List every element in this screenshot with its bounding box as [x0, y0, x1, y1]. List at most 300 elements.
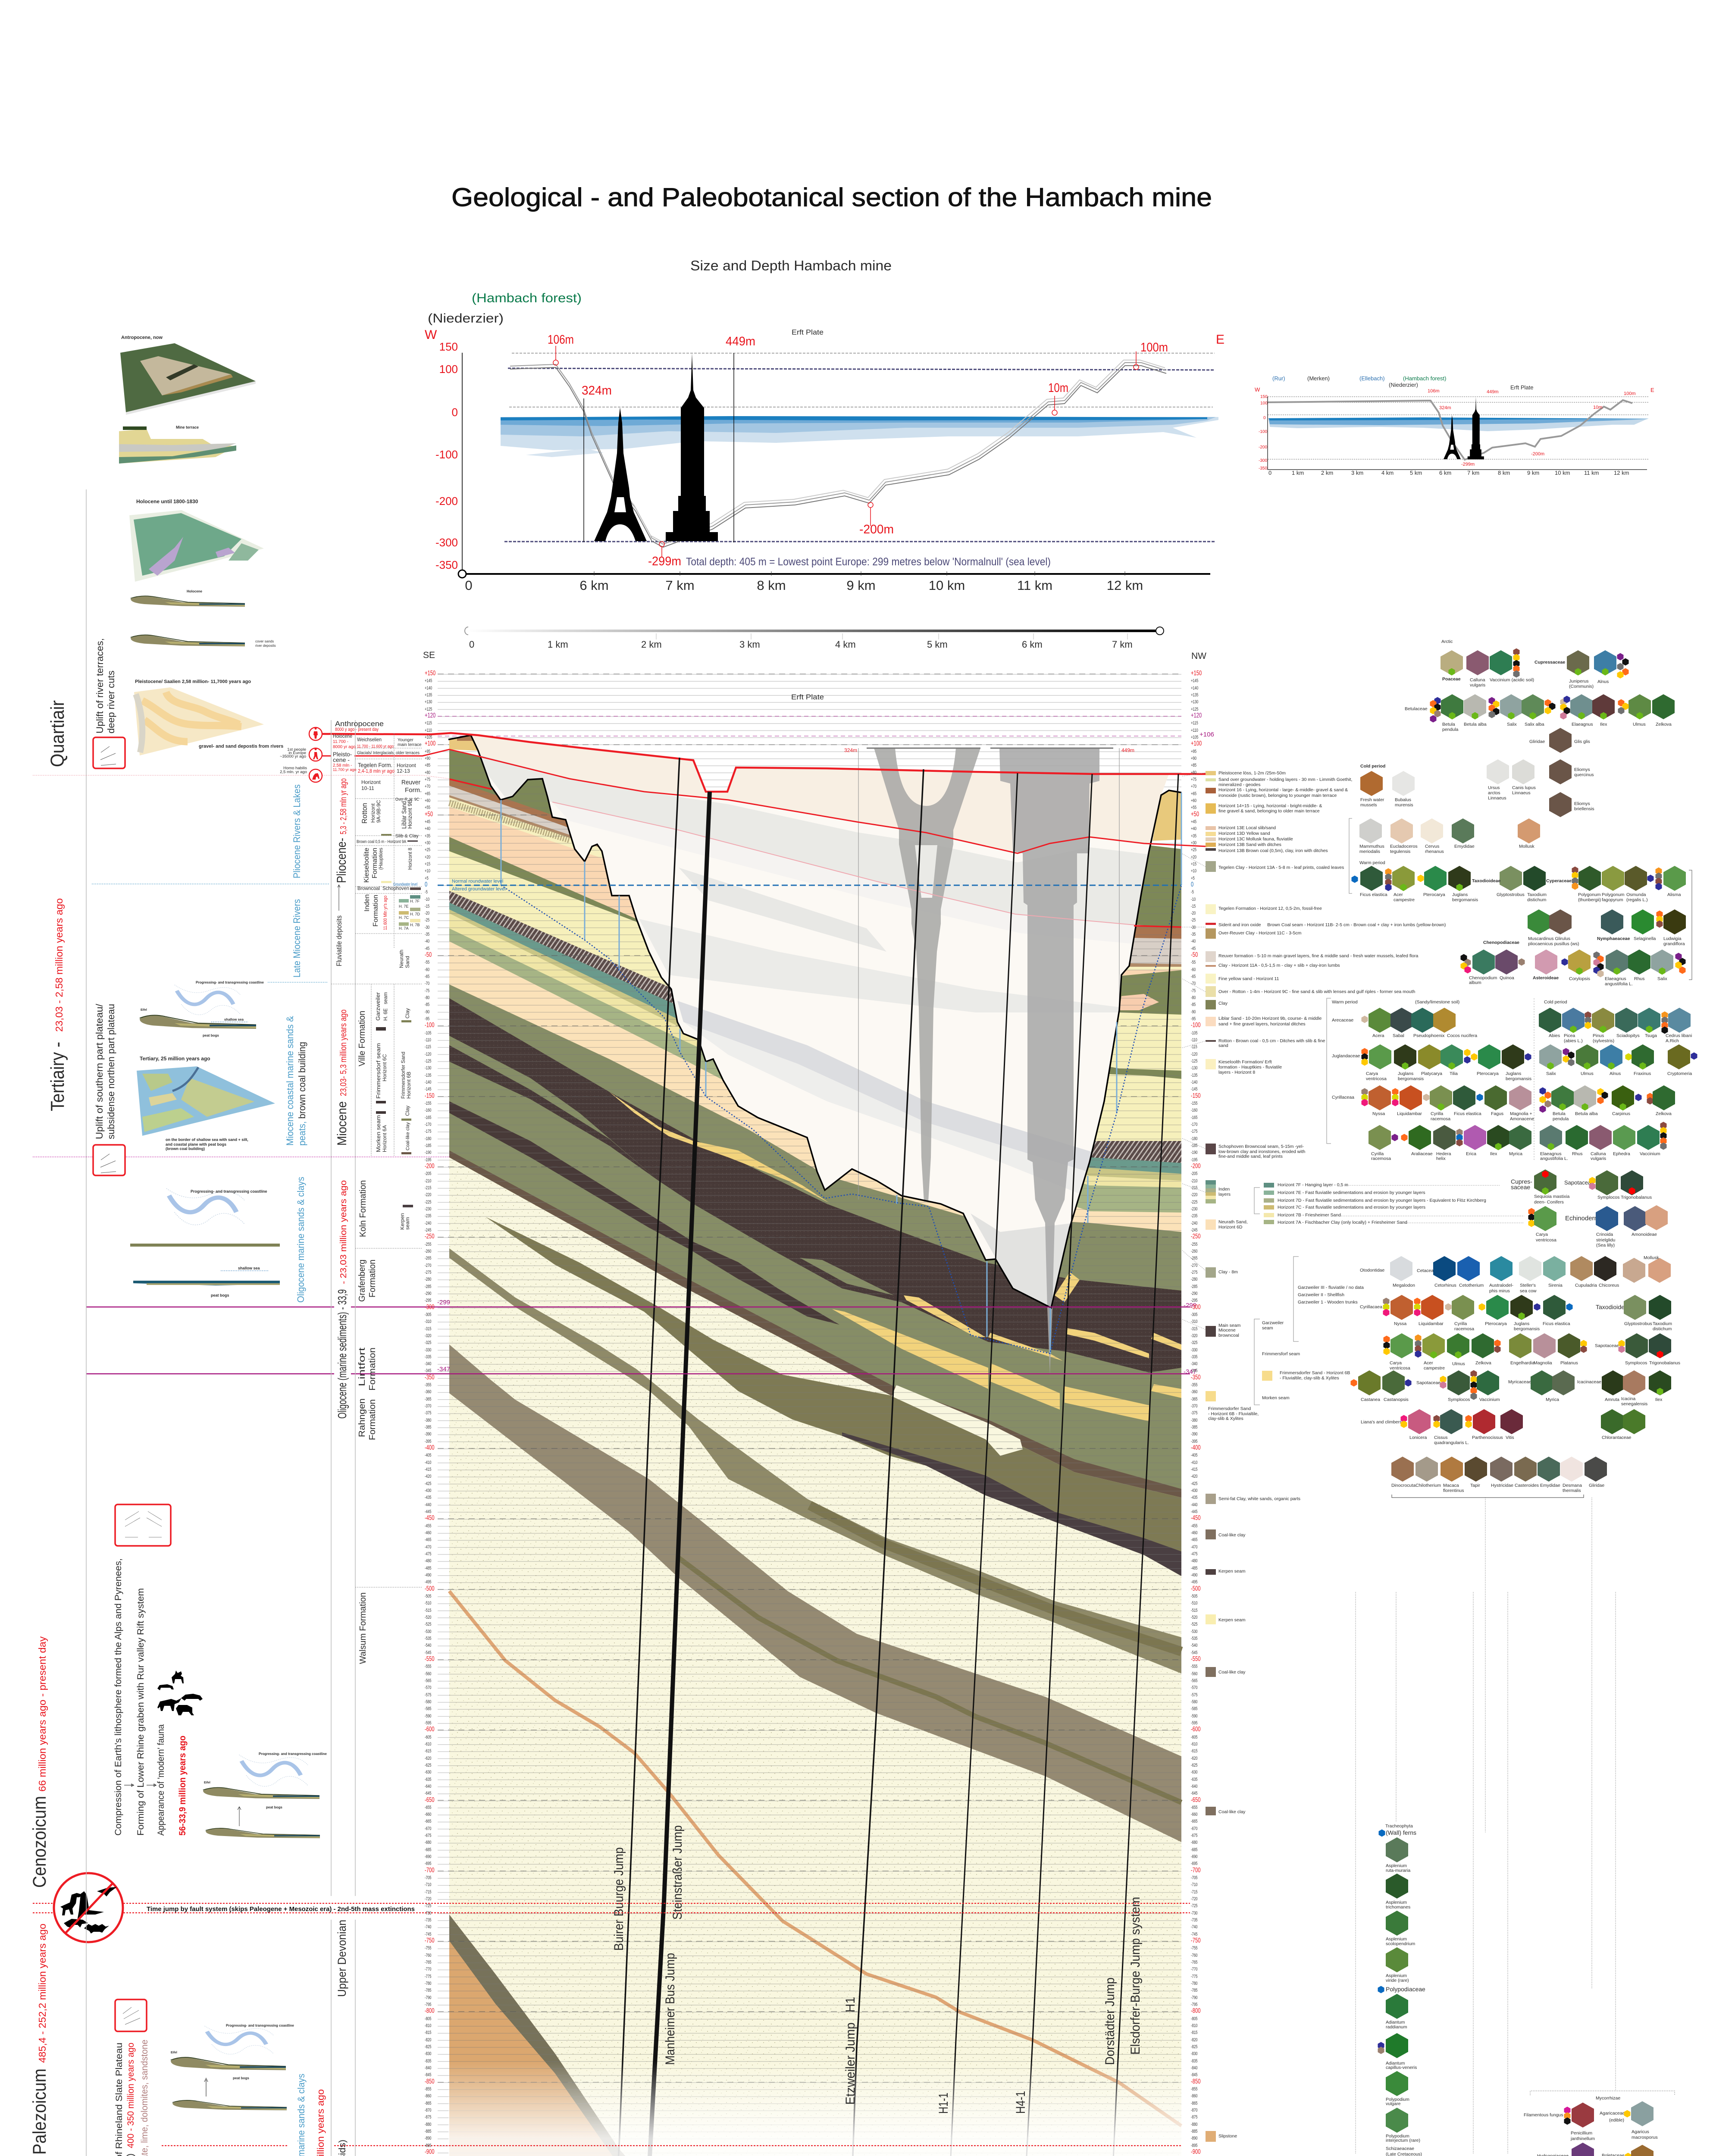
- overview km axis: 5 km: [1410, 470, 1422, 476]
- leader lines to legend: [1182, 773, 1207, 1330]
- group: Chenopodium row: Rhus: [1634, 976, 1645, 981]
- legend: lower swatches: Coal-like clay: [1218, 1809, 1246, 1814]
- Pliocene table rows: Kieseloolite: [363, 848, 370, 883]
- horizontal km axis: 6 km: [579, 578, 609, 593]
- Oligocene formations table: Formation: [368, 1399, 377, 1440]
- layer: orange slip band: [449, 1591, 1181, 2126]
- layer: Inden tan: [449, 909, 1181, 1498]
- group: warm period flora: Glyptostrobus: [1497, 892, 1525, 897]
- human era captions: Homo habilis: [283, 766, 307, 771]
- group: warm period flora: Pterocarya: [1423, 892, 1445, 897]
- group: Castanea to Ilex row: Icacinaceae: [1577, 1379, 1601, 1385]
- horizontal km axis: 12 km: [1107, 578, 1143, 593]
- note: compression: [113, 1558, 188, 1836]
- Quaternary table rows: cene -: [333, 756, 350, 763]
- panel: flora and fauna Inden and Garzweiler: [1350, 1169, 1680, 2156]
- row: Juglandaceae: bergomansis: [1506, 1076, 1531, 1081]
- horizontal km axis: 8 km: [757, 578, 786, 593]
- layer: Tegelen clay olive: [449, 749, 1181, 1498]
- horizontal km axis: [458, 570, 1210, 593]
- Inden formation table: H. 7B: [410, 923, 420, 927]
- group: Carya to Trigonobalanus row: Trigonobalanus: [1649, 1360, 1680, 1366]
- group: mammoth row: tegulensis: [1390, 849, 1410, 854]
- human era captions: [280, 747, 307, 774]
- fault labels: Dorstädter Jump: [1103, 1977, 1117, 2065]
- ghost tower guides and captions: [844, 747, 1134, 1200]
- legend: lower swatches: [1206, 1494, 1300, 2156]
- left period separators: [33, 733, 450, 1587]
- group: Arctic flora: Juniperus: [1569, 679, 1589, 684]
- icon: uplift box Devonian: [115, 1999, 147, 2031]
- group: marine fauna: Mollusk: [1644, 1255, 1659, 1260]
- group: Castanea to Ilex row: Icacina: [1621, 1396, 1635, 1401]
- note: plateau uplift: subsidense northen part plateau: [106, 1004, 116, 1139]
- group: warm period flora: Warm period: [1359, 860, 1385, 865]
- panel: geological cross section: [322, 674, 1207, 2156]
- Oligocene formations table: Formation: [368, 1348, 377, 1391]
- human era captions: in Europe: [288, 751, 306, 755]
- layer: clay 8m olive: [449, 984, 1181, 1498]
- epoch: Miocene: [335, 1009, 349, 1146]
- epoch: Pliocene: [335, 778, 349, 966]
- Oligocene formations table: Formation: [368, 1260, 377, 1297]
- fungi right: [1598, 2101, 1658, 2156]
- vertical axis: 100: [439, 363, 458, 376]
- Quaternary table rows: Tegelen Form.: [358, 761, 392, 768]
- overview km axis: 4 km: [1381, 470, 1394, 476]
- diagram: Holocene sections: Holocene: [187, 589, 203, 593]
- group: Carya and echinoderms: Echinoderms: [1565, 1215, 1603, 1222]
- group: mammoth row: Emydidae: [1454, 844, 1475, 849]
- place labels: Erft Plate: [792, 328, 824, 336]
- Inden formation table: H. 7F: [410, 899, 420, 903]
- group: lianas and climbers: Vitis: [1506, 1435, 1514, 1440]
- legend: Pliocene captions: Reuver formation - 5-10 m main gravel layers, fine & middle sand - fresh water mussels, leafed flora: [1218, 953, 1419, 959]
- text: peats: peats, brown coal building: [297, 1042, 307, 1146]
- row: Araliaceae and heaths: Myrica: [1509, 1151, 1522, 1156]
- group: Miocene mammals: Emydidae: [1540, 1483, 1560, 1488]
- row: Arecaceae and conifers: [1332, 1008, 1692, 1044]
- legend: Pliocene captions: Horizont 16 - Lying, horizontal - large- &-middle- gravel & sand &: [1218, 787, 1348, 793]
- Oligocene formations table: seam: [404, 1217, 410, 1230]
- row: Araliaceae and heaths: Calluna: [1591, 1151, 1606, 1156]
- overview km axis: 9 km: [1527, 470, 1539, 476]
- group: warm period flora: distichum: [1527, 897, 1547, 903]
- layer: sand stipple: [449, 1157, 1181, 2156]
- place labels: E: [1216, 332, 1224, 347]
- Quaternary table rows: 12-13: [397, 768, 410, 774]
- diagram: Tertiary coastline: Progressing- and transgressing coastline: [196, 981, 264, 984]
- overview km axis: 8 km: [1498, 470, 1510, 476]
- time jump lines: [33, 1903, 1190, 2146]
- group: warm period flora: Taxodioideae: [1472, 878, 1500, 884]
- human era captions: ~35000 yr ago: [280, 754, 306, 759]
- panel: chronostratigraphy table: [280, 720, 422, 1664]
- overview labels: (Niederzier): [1389, 382, 1418, 388]
- Miocene formations table: Garzweiler: [375, 992, 381, 1021]
- icon: Eiffel tower silhouette: [594, 407, 647, 541]
- group: Carya and echinoderms: ventricosa: [1536, 1238, 1556, 1243]
- map: Holocene: [129, 498, 264, 582]
- layer: Inden pale: [449, 913, 1181, 1498]
- group: Betulaceae: Zelkova: [1656, 722, 1672, 727]
- group: lianas and climbers: Chlorantaceae: [1602, 1435, 1631, 1440]
- legend: lower swatches: Semi-fat Clay, white sands, organic parts: [1218, 1496, 1300, 1501]
- horizontal km axis: 11 km: [1017, 578, 1052, 593]
- epoch: Upper Devonian: Upper Devonian: [335, 1920, 348, 1997]
- group: Cyrillaceae and Taxodioideae: Pterocarya: [1485, 1321, 1507, 1326]
- group: cold period fauna: Fresh water: [1360, 797, 1384, 802]
- Pliocene table rows: Reuver: [401, 779, 420, 786]
- legend: Pliocene captions: formation - Hauptkies - fluviatile: [1218, 1065, 1282, 1070]
- grid lines: [438, 674, 1181, 2156]
- void: light band: [683, 1022, 1094, 1200]
- Pliocene table rows: Brown coal 0,5 m - Horizont 9A: [357, 839, 406, 844]
- epoch: Oligocene: - 23,03 million years ago: [339, 1180, 348, 1284]
- row: Cyrillaceae: [1332, 1085, 1675, 1122]
- layer: thin clay: [449, 795, 1181, 1498]
- void: cream ghost band: [471, 733, 1181, 853]
- Pliocene table rows: (Hauptkies: [378, 848, 384, 870]
- group: Carya to Trigonobalanus row: Carya: [1390, 1360, 1402, 1366]
- Quaternary table rows: Holocene: [333, 733, 352, 739]
- ghost Empire State scale: [999, 748, 1099, 1375]
- vertical axis: -300: [435, 536, 458, 549]
- note: river terraces: Uplift of river terraces,: [94, 638, 105, 733]
- Pliocene table rows: Rotton: [360, 803, 369, 824]
- group: Castanea to Ilex row: Castanea: [1361, 1397, 1380, 1402]
- note: plateau uplift: Uplift of southern part plateau/: [94, 1003, 105, 1139]
- group: Cyrillaceae and Taxodioideae: Cyrilla: [1454, 1321, 1467, 1326]
- era date: Palezoicum: 485,4 - 252,2 million years ago: [37, 1924, 48, 2063]
- group: marine fauna: Cupuladria: [1575, 1283, 1597, 1288]
- note: plateau uplift: [94, 1003, 116, 1139]
- legend: Pliocene captions: fine gravel & sand, belonging to older main terrace: [1218, 808, 1320, 814]
- row: Juglandaceae: Salix: [1546, 1071, 1556, 1076]
- purple depth captions: [437, 731, 1214, 1376]
- group: Miocene mammals: Macaca: [1443, 1483, 1459, 1488]
- group: wall ferns: viride (rare): [1386, 1978, 1409, 1983]
- map: Pleistocene: gravel- and sand depostis from rivers: [199, 744, 283, 749]
- legend: Pliocene captions: Over-Reuver Clay - Horizont 11C - 3-5cm: [1218, 931, 1302, 936]
- layer: cream wedge: [892, 1385, 1023, 1456]
- group: Gliridae: Glis glis: [1574, 739, 1590, 744]
- panel: small overview chart: [1255, 375, 1654, 476]
- group: warm period flora: Cyperaceae: [1546, 878, 1572, 884]
- overview labels: -100: [1259, 429, 1267, 434]
- scale labels: NW: [1191, 651, 1206, 661]
- fungi left: janthinellum: [1570, 2136, 1595, 2141]
- depth labels: -299m: [648, 555, 681, 568]
- group: aquatic plants: Selaginella: [1634, 936, 1656, 941]
- group: Chenopodium row: Asteroideae: [1533, 975, 1559, 981]
- Miocene formations table: Horizont 6C: [382, 1054, 388, 1081]
- legend: Miocene and Oligocene: [1206, 1219, 1364, 1421]
- human era captions: 2,5 mln. yr ago: [280, 770, 307, 774]
- note: compression: Appearance of 'modern' fauna: [156, 1724, 166, 1836]
- overview km axis: [1268, 397, 1647, 476]
- panel: epoch column: [307, 778, 395, 2156]
- diagram: Holocene sections: [131, 589, 276, 648]
- group: Polypodiaceae: Adiantum: [1386, 2061, 1405, 2066]
- layer: fine yellow sand: [449, 797, 1181, 1498]
- layer: lower seam: [449, 1101, 839, 1325]
- scale labels: 7 km: [1112, 639, 1133, 650]
- group: Castanea to Ilex row: Myrica: [1546, 1397, 1559, 1402]
- Quaternary table rows: 11.700 -: [333, 740, 348, 744]
- legend: Miocene and Oligocene: Morken seam: [1262, 1395, 1290, 1401]
- Miocene formations table: Horizont 6A: [382, 1125, 388, 1152]
- purple elevation lines: [438, 716, 1181, 736]
- row: Araliaceae and heaths: racemosa: [1371, 1156, 1391, 1161]
- place labels: W: [425, 328, 437, 342]
- row: Cyrillaceae: Liquidambar: [1397, 1111, 1422, 1116]
- human era captions: 1st people: [287, 747, 306, 752]
- group: warm period flora: fagopyrum: [1602, 897, 1623, 903]
- panel: paleogeography maps: [119, 335, 327, 2156]
- group: Carya to Trigonobalanus row: Engelhardia: [1510, 1360, 1534, 1366]
- group: lianas and climbers: Parthenocissus: [1472, 1435, 1503, 1440]
- overview km axis: 11 km: [1584, 470, 1599, 476]
- era: Cenozoicum: Cenozoicum: [29, 1796, 50, 1888]
- group: warm period flora: (regalis L.): [1626, 897, 1648, 903]
- group: mammoth row: meriodalis: [1359, 849, 1380, 854]
- horizontal km axis: 9 km: [846, 578, 876, 593]
- note: Hercynic orogenese: 400 - 350 million years ago: [126, 2043, 136, 2148]
- Inden formation table: Sand: [404, 956, 410, 968]
- group: marine fauna: Megalodon: [1393, 1283, 1415, 1288]
- row: Arecaceae and conifers: Abies: [1549, 1033, 1560, 1038]
- group: wall ferns: Asplenium: [1386, 1973, 1407, 1978]
- group: wall ferns: (Wall) ferns: [1386, 1829, 1416, 1836]
- overview labels: W: [1255, 386, 1260, 393]
- legend: Pliocene captions: Siderit and iron oxide Brown Coal seam - Horizont 11B- 2-5 cm - Brown coal + clay + iron lumbs (yellow-brown): [1218, 922, 1446, 928]
- Pliocene table rows: Liblar Sand: [401, 801, 408, 829]
- depth labels: -200m: [859, 523, 894, 536]
- depth labels: Total depth: 405 m = Lowest point Europe: 299 metres below 'Normalnull' (sea level): [686, 556, 1051, 568]
- Quaternary table rows: Horizont: [397, 762, 416, 768]
- note: Hercynic orogenese: [114, 2040, 150, 2156]
- legend: Pliocene captions: Horizont 13B Sand with ditches: [1218, 842, 1281, 847]
- legend: Miocene and Oligocene: browncoal: [1218, 1333, 1239, 1338]
- overview labels: -300: [1259, 458, 1267, 463]
- legend: lower swatches: Coal-like clay: [1218, 1670, 1246, 1675]
- overview labels: -200: [1259, 445, 1267, 450]
- fault labels: Etzweiler Jump H1: [843, 1997, 858, 2105]
- note: river terraces: [94, 638, 116, 733]
- group: Miocene mammals: Hystricidae: [1491, 1483, 1513, 1488]
- row: Arecaceae and conifers: Arecaceae: [1332, 1018, 1353, 1023]
- legend: Pliocene captions: Horizont 14+15 - Lying, horizontal - bright-middle- &: [1218, 803, 1322, 808]
- group: Arctic flora: vulgaris: [1470, 683, 1485, 688]
- group: Carya and echinoderms: Amonoideae: [1632, 1232, 1657, 1237]
- scale labels: [423, 633, 1206, 661]
- group: marine fauna: Steller's: [1520, 1283, 1536, 1288]
- legend: Miocene and Oligocene: Frimmersdorfer Sand - Horizont 6B: [1280, 1370, 1350, 1376]
- Oligocene formations table: Walsum Formation: [358, 1592, 368, 1664]
- group: aquatic plants: Nymphaeaceae: [1597, 936, 1630, 941]
- group: Castanea to Ilex row: Vaccinium: [1479, 1397, 1500, 1402]
- groundwater labels: Altered groundwater level: [452, 887, 506, 892]
- row: Araliaceae and heaths: helix: [1436, 1156, 1446, 1161]
- group: Cyrillaceae and Taxodioideae: Juglans: [1514, 1321, 1529, 1326]
- dashed flow lines: [1356, 1498, 1616, 2156]
- scale labels: 4 km: [835, 639, 856, 650]
- group: Polypodiaceae: Schizaeaceae: [1386, 2146, 1414, 2151]
- diagram: Oligocene coastline: Progressing- and transgressing coastline: [191, 1189, 267, 1194]
- vertical axis: 150: [439, 340, 458, 353]
- group: Gliridae: quercinus: [1574, 772, 1594, 777]
- group: Polypodiaceae: vulgare: [1386, 2101, 1401, 2106]
- group: warm period flora: Polygonum: [1578, 892, 1601, 897]
- group: Arctic flora: Arctic: [1441, 639, 1453, 644]
- overview labels: 100m: [1624, 391, 1636, 396]
- group: warm period flora: Taxodium: [1527, 892, 1547, 897]
- map: Anthropocene mine: Antropocene, now: [121, 335, 163, 340]
- Inden formation table: H. 7D: [410, 912, 420, 916]
- row: Arecaceae and conifers: (sylvestris): [1593, 1038, 1614, 1044]
- layer: Liblar sand peach: [449, 807, 1181, 1498]
- overview water band: [1268, 417, 1649, 431]
- Quaternary table rows: 11.700 - 11.600 yr ago: [357, 744, 394, 749]
- group: Gliridae: Gliridae: [1529, 739, 1545, 744]
- Miocene formations table: H. 6E seam: [382, 992, 388, 1021]
- ghost Eiffel tower scale: [874, 748, 980, 1202]
- Quaternary table rows: main terrace: [398, 743, 422, 747]
- group: Betulaceae: Salix alba: [1525, 722, 1544, 727]
- legend: Miocene and Oligocene: Frimmersdorfer Sand: [1208, 1406, 1251, 1411]
- group: Betulaceae: Ulmus: [1633, 722, 1646, 727]
- row: Juglandaceae: Alnus: [1610, 1071, 1621, 1076]
- row: Araliaceae and heaths: Elaeagnus: [1540, 1151, 1562, 1156]
- panel: tectonic notes: [93, 638, 203, 2156]
- group: warm period flora: Osmunda: [1626, 892, 1646, 897]
- Inden formation table: H. 7C: [399, 915, 409, 920]
- row: Cyrillaceae: Zelkova: [1656, 1111, 1672, 1116]
- time jump caption backing: [142, 1904, 418, 1912]
- diagram: Oligocene coastline: shallow sea: [238, 1266, 260, 1270]
- group: Carya to Trigonobalanus row: campestre: [1424, 1366, 1445, 1371]
- Miocene formations table: Frimmersdorfer Sand: [400, 1052, 406, 1099]
- bracket and headers: (Sandy/limestone soil): [1415, 1000, 1459, 1005]
- vertical axis: 0: [452, 406, 458, 419]
- group: Miocene mammals: florentinus: [1443, 1488, 1464, 1493]
- group: aquatic plants: [1483, 909, 1686, 946]
- group: Cyrillaceae and Taxodioideae: distichum: [1653, 1326, 1672, 1332]
- layer: olive wedge between seams: [449, 1036, 660, 1181]
- overview km axis: 3 km: [1351, 470, 1363, 476]
- icon: Empire State building silhouette: [666, 353, 718, 541]
- title: Geological - and Paleobotanical section of the Hambach mine: [451, 183, 1212, 212]
- row: Araliaceae and heaths: Araliaceae: [1411, 1151, 1433, 1156]
- Miocene formations table: Clay: [404, 1008, 410, 1018]
- group: Miocene mammals: thermalis: [1563, 1488, 1581, 1493]
- group: marine fauna: phis mirus: [1489, 1288, 1510, 1294]
- fault labels: Elsdorfer-Burge Jump system: [1128, 1897, 1143, 2055]
- group: lianas and climbers: [1361, 1409, 1645, 1445]
- row: Araliaceae and heaths: Ilex: [1490, 1151, 1497, 1156]
- legend: Pliocene captions: Liblar Sand - 10-20m Horizont 9b, course- & middle: [1218, 1016, 1322, 1021]
- pink ghost line: [552, 802, 1144, 926]
- overview labels: 0: [1263, 416, 1266, 420]
- legend: lower swatches: Kerpen seam: [1218, 1569, 1246, 1574]
- diagram: Tertiary coastline: [140, 981, 264, 1037]
- group: Cyrillaceae and Taxodioideae: bergomansis: [1514, 1326, 1540, 1332]
- height markers: [553, 346, 1139, 557]
- row: Juglandaceae: [1332, 1044, 1697, 1081]
- group: aquatic plants: Chenopodiaceae: [1483, 940, 1519, 945]
- Quaternary table rows: Glacials/ Interglacials, older terraces: [357, 751, 420, 755]
- row: Juglandaceae: Carya: [1366, 1071, 1378, 1076]
- row: Juglandaceae: bergomansis: [1398, 1076, 1424, 1081]
- row: Araliaceae and heaths: Vaccinium: [1640, 1151, 1660, 1156]
- group: Cupressaceae and Sapotaceae: deen- Conifers: [1534, 1200, 1564, 1205]
- scale labels: 6 km: [1022, 639, 1043, 650]
- Quaternary table rows: 11.700 yr ago: [333, 768, 356, 772]
- group: cold period fauna: murensis: [1395, 802, 1413, 808]
- Pliocene table rows: [357, 779, 422, 891]
- groundwater labels: Normal roundwater level: [452, 879, 503, 884]
- epoch: Miocene: 23,03- 5,3 million years ago: [339, 1009, 348, 1096]
- group: Miocene mammals: [1391, 1457, 1607, 1498]
- row: Juglandaceae: Juglandaceae: [1332, 1053, 1360, 1059]
- group: wall ferns: Asplenium: [1386, 1937, 1407, 1942]
- group: cold period fauna: mussels: [1360, 802, 1377, 808]
- panel: section km scale: [423, 627, 1206, 661]
- legend: Miocene and Oligocene: - Horizont 6B - Fluvialtile,: [1208, 1411, 1259, 1416]
- Pliocene table rows: Slib & Clay: [395, 834, 419, 839]
- row: Araliaceae and heaths: Hedera: [1436, 1151, 1451, 1156]
- layer: horizon 11 brown: [449, 779, 1181, 1498]
- Oligocene formations table: Rahngen: [357, 1398, 367, 1437]
- Quaternary table rows: 8000 yr ago: [333, 745, 356, 749]
- map: Pleistocene: [134, 679, 283, 755]
- group: Cyrillaceae and Taxodioideae: [1360, 1295, 1672, 1332]
- legend: Pliocene captions: Sand over groundwater - holding layers - 30 mm - Limmith Goethit,: [1218, 777, 1352, 782]
- map: Pleistocene: Pleistocene/ Saalien 2,58 million- 11,7000 years ago: [135, 679, 251, 684]
- Pliocene table rows: 10-11: [361, 785, 374, 791]
- group: Cyrillaceae and Taxodioideae: Taxodium: [1653, 1321, 1672, 1326]
- legend: Miocene and Oligocene: Clay - 8m: [1218, 1269, 1238, 1275]
- legend: lower swatches: Coal-like clay: [1218, 1532, 1246, 1538]
- bracket: [1530, 2091, 1675, 2156]
- row: Cyrillaceae: Betula alba: [1575, 1111, 1598, 1116]
- era: Tertiairy: Tertiairy -: [47, 1042, 68, 1111]
- left frame lines: [86, 489, 355, 2156]
- overview km axis: 7 km: [1467, 470, 1479, 476]
- purple depth captions: -347: [437, 1366, 450, 1373]
- depth labels: 324m: [582, 384, 612, 398]
- row: Juglandaceae: ventricosa: [1366, 1076, 1387, 1081]
- row: Juglandaceae: Tilia: [1450, 1071, 1458, 1076]
- row: Cyrillaceae: Magnolia +: [1510, 1111, 1532, 1116]
- layer: Over-Rotton squiggles: [449, 803, 570, 840]
- deepest point reference lines: [86, 1307, 1190, 1374]
- group: mammoth row: Cervus: [1425, 844, 1439, 849]
- scale labels: 1 km: [548, 639, 568, 650]
- Quaternary table rows: Anthropocene: [335, 720, 384, 728]
- group: Carya to Trigonobalanus row: [1383, 1333, 1680, 1371]
- scale bar: [466, 630, 1160, 632]
- bracket and headers: Warm period: [1332, 1000, 1358, 1005]
- fault lines: [609, 758, 1178, 2156]
- legend: Inden layers: Horizont 7C - Fast fluviatile sedimentations and erosion by younger layers: [1278, 1205, 1425, 1210]
- layer: middle clay band: [449, 1248, 1181, 1673]
- row: Arecaceae and conifers: Acera: [1372, 1033, 1384, 1038]
- group: cold period fauna: Cold period: [1360, 764, 1385, 769]
- row: Juglandaceae: Pterocarya: [1477, 1071, 1499, 1076]
- legend: Miocene and Oligocene: clay-slib & Xylites: [1208, 1416, 1243, 1421]
